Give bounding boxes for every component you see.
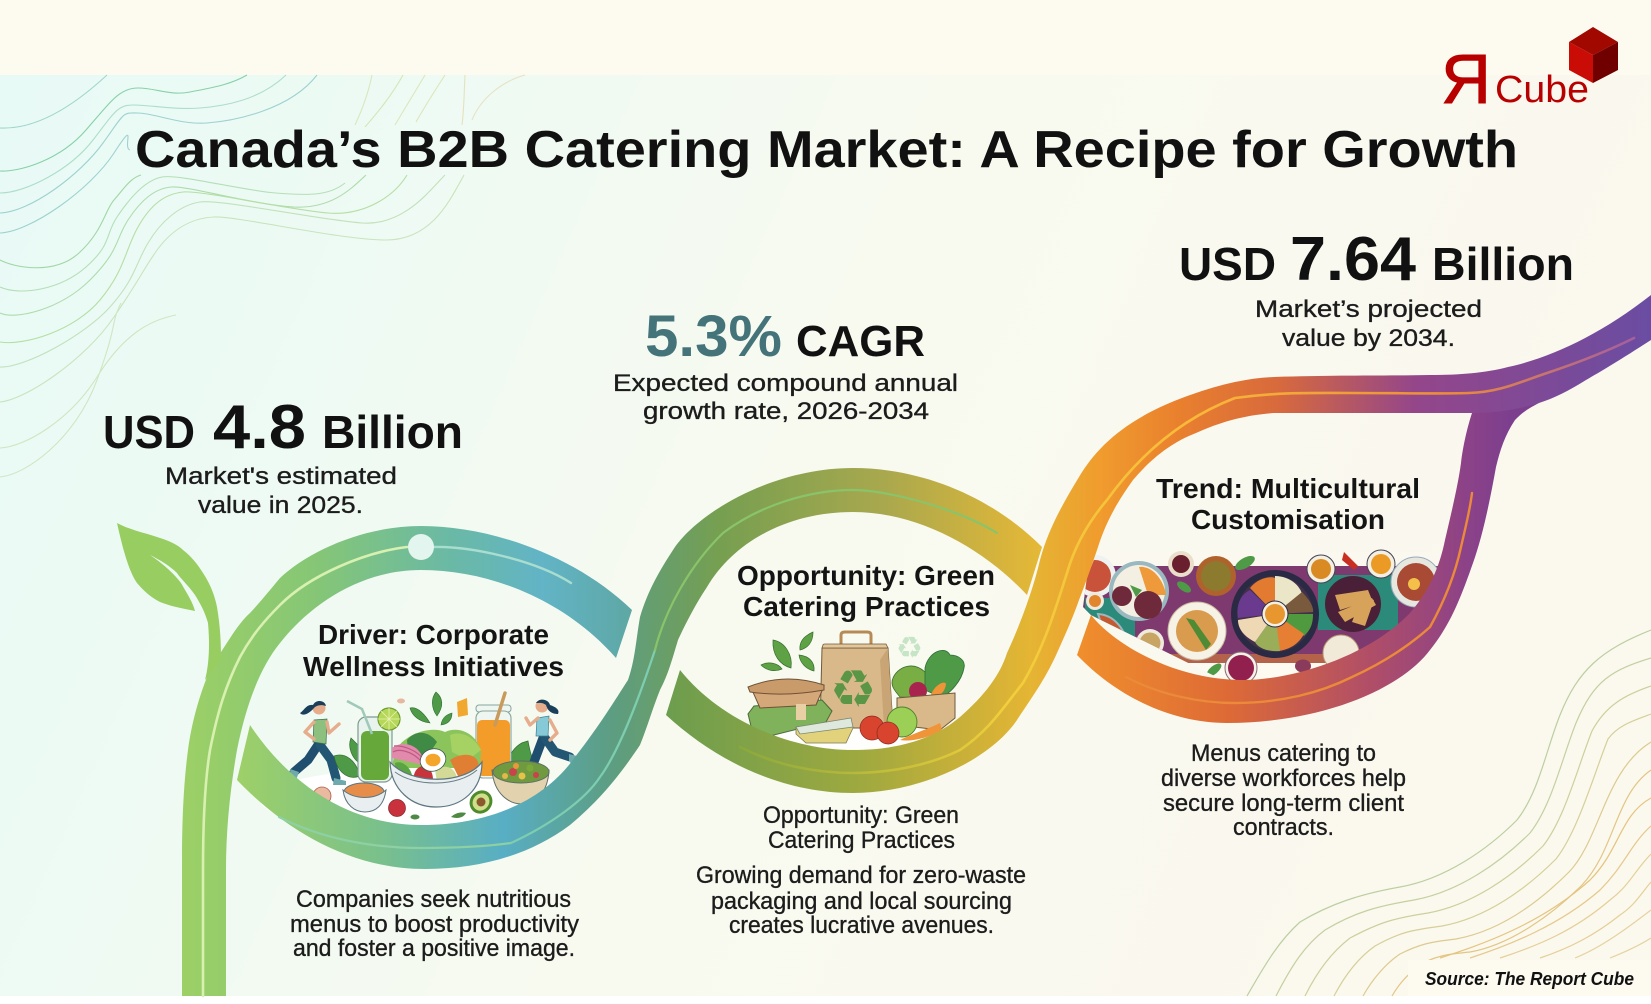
icon: right runner <box>526 700 577 768</box>
stat: 5.3% CAGR <box>645 304 925 369</box>
icon: green smoothie jar <box>334 701 400 782</box>
stat: USD 7.64 Billion: Billion <box>1432 238 1574 290</box>
stat: USD 4.8 Billion: Billion <box>322 406 463 458</box>
heading: trend: Customisation <box>1191 504 1385 535</box>
text: opportunity description <box>696 802 1026 939</box>
logo: RCube: Cube <box>1495 69 1589 111</box>
text: opportunity description: Opportunity: Green <box>763 802 959 829</box>
logo: RCube: Я <box>1441 40 1491 118</box>
title: Canada’s B2B Catering Market: A Recipe for Growth <box>135 121 1518 179</box>
stat: USD 4.8 Billion: 4.8 <box>213 393 306 462</box>
text: trend description: diverse workforces help <box>1161 765 1406 792</box>
heading: driver <box>303 619 564 682</box>
text: 2034 value caption: Market’s projected <box>1255 296 1482 323</box>
ribbon highlights <box>203 338 1634 996</box>
text: trend description <box>1161 740 1406 841</box>
text: driver description: Companies seek nutritious <box>296 886 571 913</box>
icon: plates and bowls <box>1074 550 1441 684</box>
stat: USD 7.64 Billion: USD <box>1179 238 1276 290</box>
text: 2025 value caption: value in 2025. <box>198 492 363 519</box>
illustration: multicultural food table <box>1083 550 1438 680</box>
icon: stacked takeaway containers <box>748 679 853 743</box>
icon: red cube <box>1569 27 1618 83</box>
text: opportunity description: creates lucrative avenues. <box>729 912 994 939</box>
text: CAGR caption: Expected compound annual <box>613 370 958 397</box>
stat: 5.3% CAGR: CAGR <box>796 317 925 366</box>
heading: opportunity: Catering Practices <box>743 591 990 622</box>
text: trend description: Menus catering to <box>1191 740 1376 767</box>
stat: USD 4.8 Billion: USD <box>103 406 195 458</box>
marker: dot on first arc <box>408 534 434 560</box>
heading: driver: Driver: Corporate <box>318 619 549 650</box>
text: opportunity description: Catering Practices <box>768 827 955 854</box>
text: trend description: contracts. <box>1233 814 1334 841</box>
heading: opportunity: Opportunity: Green <box>737 560 995 591</box>
text: driver description <box>290 886 579 962</box>
stat: 5.3% CAGR: 5.3% <box>645 304 782 369</box>
illustration: green catering packaging and produce <box>740 631 964 749</box>
text: CAGR caption <box>613 370 958 425</box>
illustration: corporate wellness food and runners <box>260 692 590 832</box>
icon: faded recycling mark: ♻ <box>896 631 923 666</box>
icon: paper bag with recycling symbol <box>820 632 893 728</box>
icon: flying leaves <box>761 632 814 671</box>
text: opportunity description: Growing demand for zero-waste <box>696 862 1026 889</box>
stat: USD 7.64 Billion <box>1179 225 1574 294</box>
icon: leaf sprout <box>117 523 221 680</box>
text: 2025 value caption <box>165 463 397 519</box>
icon: soup bowl and small foods <box>313 692 497 820</box>
text: 2025 value caption: Market's estimated <box>165 463 397 490</box>
text: 2034 value caption <box>1255 296 1482 352</box>
icon: left runner <box>290 701 346 785</box>
heading: opportunity <box>737 560 995 622</box>
icon: paper bag with recycling symbol: ♻ <box>830 660 876 720</box>
icon: fruit salad bowl <box>492 761 549 804</box>
text: trend description: secure long-term client <box>1163 790 1404 817</box>
ribbon: first lower loop into second arc <box>237 468 1042 869</box>
ribbon: growth path <box>117 295 1651 996</box>
text: driver description: menus to boost productivity <box>290 911 579 938</box>
text: driver description: and foster a positive image. <box>293 935 575 962</box>
logo: RCube <box>1441 27 1618 118</box>
icon: salad bowl with egg <box>390 730 482 807</box>
text: CAGR caption: growth rate, 2026-2034 <box>643 398 929 425</box>
icon: crate with vegetables <box>860 650 964 744</box>
heading: driver: Wellness Initiatives <box>303 651 564 682</box>
ribbon: second lower loop rising to the end <box>666 295 1651 793</box>
heading: trend: Trend: Multicultural <box>1156 473 1420 504</box>
stat: USD 7.64 Billion: 7.64 <box>1290 225 1417 294</box>
icon: orange juice jar <box>476 693 535 778</box>
stat: USD 4.8 Billion <box>103 393 463 462</box>
text: 2034 value caption: value by 2034. <box>1282 325 1455 352</box>
source note <box>1408 960 1651 996</box>
text: opportunity description: packaging and local sourcing <box>711 888 1012 915</box>
source note: Source: The Report Cube <box>1425 968 1634 989</box>
ribbon: third lower loop <box>1077 403 1539 723</box>
ribbon: stem and first arc <box>182 526 632 996</box>
heading: trend <box>1156 473 1420 535</box>
